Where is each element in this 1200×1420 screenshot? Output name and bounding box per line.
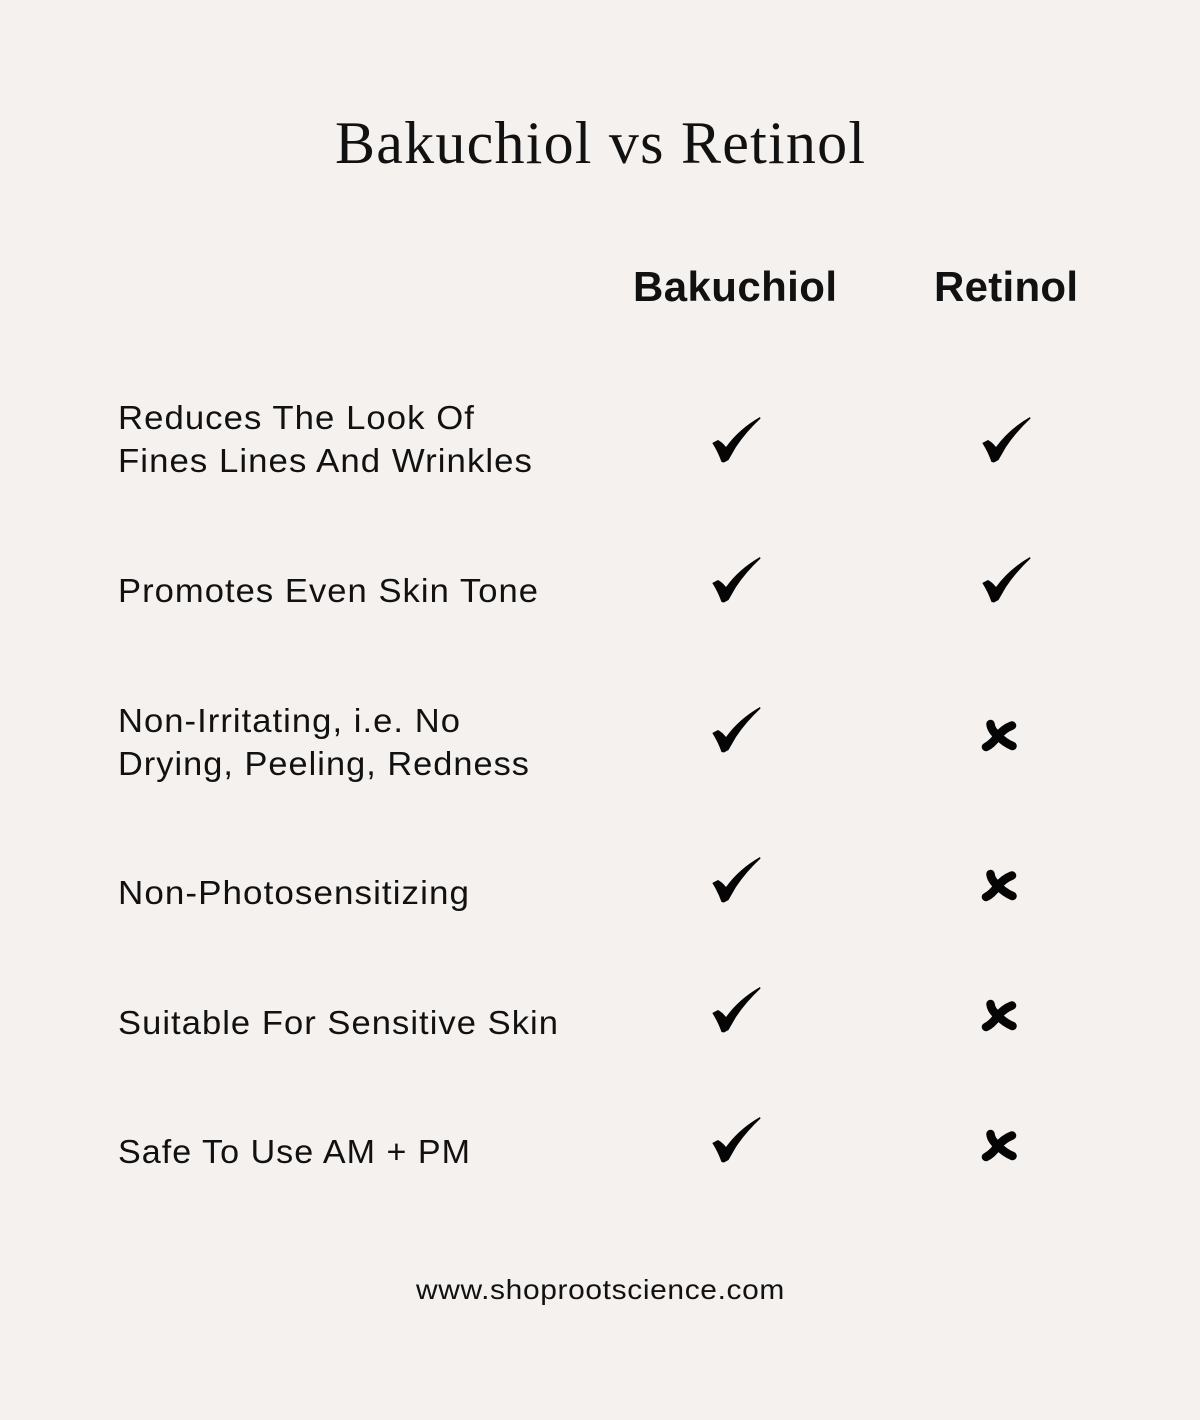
row 6: AM + PM (118, 1117, 1012, 1170)
footer url: www.shoprootscience.com (415, 1274, 785, 1305)
row 4: non-photosensitizing: Non-Photosensitizing (118, 874, 470, 911)
row 2: even skin tone: Promotes Even Skin Tone (118, 572, 539, 609)
column heading: Bakuchiol: Bakuchiol (633, 263, 837, 310)
row 4: non-photosensitizing (118, 857, 1012, 911)
row 3: non-irritating (118, 702, 1012, 782)
row 3: non-irritating: Non-Irritating, i.e. No (118, 702, 461, 739)
row 1: fine lines and wrinkles: Fines Lines And Wrinkles (118, 442, 533, 479)
row 5: sensitive skin: Suitable For Sensitive Skin (118, 1004, 559, 1041)
row 2: even skin tone (118, 557, 1030, 609)
row 6: AM + PM: Safe To Use AM + PM (118, 1133, 471, 1170)
row 1: fine lines and wrinkles: Reduces The Look Of (118, 399, 475, 436)
row 5: sensitive skin (118, 987, 1012, 1041)
row 3: non-irritating: Drying, Peeling, Redness (118, 745, 530, 782)
title: Bakuchiol vs Retinol (335, 110, 865, 176)
row 1: fine lines and wrinkles (118, 399, 1030, 479)
column heading: Retinol: Retinol (934, 263, 1078, 310)
